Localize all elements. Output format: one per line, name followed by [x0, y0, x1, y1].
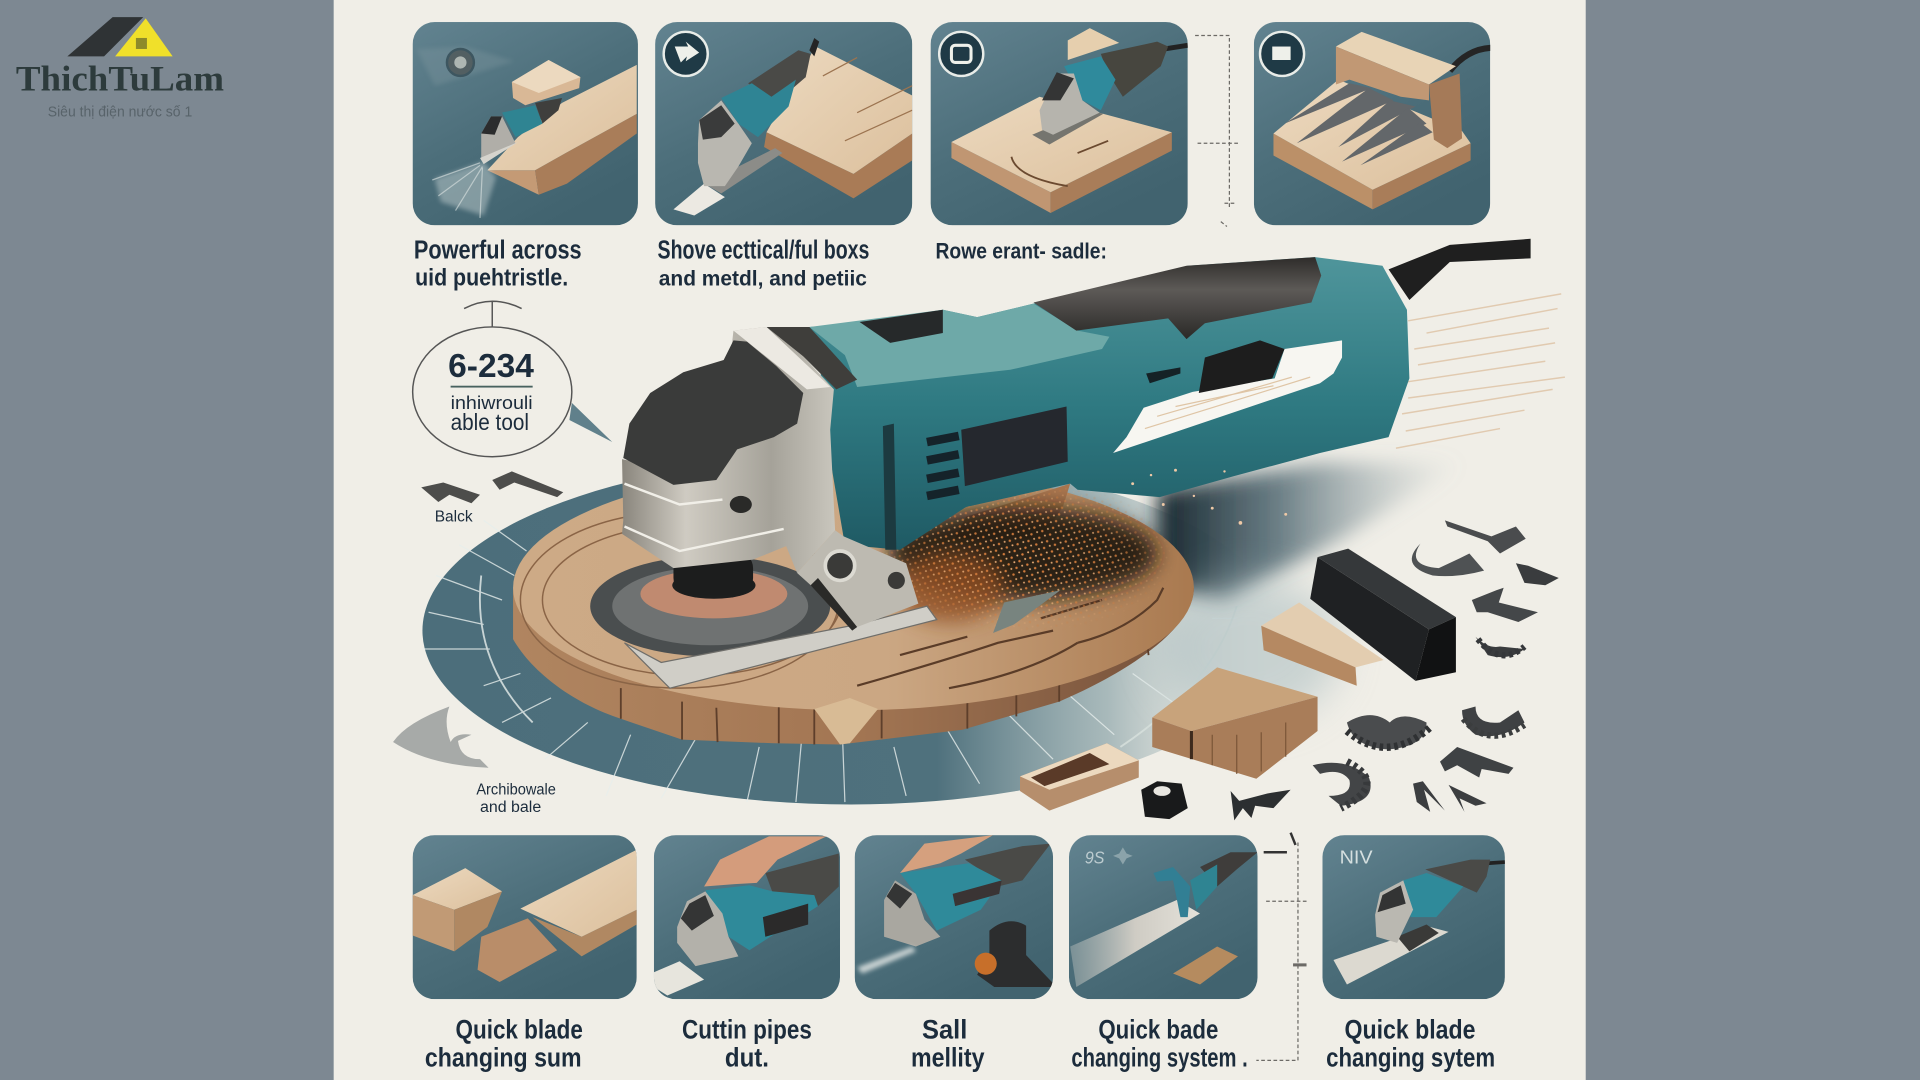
tool teal body — [1064, 56, 1116, 110]
bubble text: inhiwrouli — [451, 392, 533, 413]
card: top 3 tool on block — [931, 22, 1188, 225]
card background — [655, 22, 912, 225]
card background — [413, 835, 637, 999]
tick marks — [422, 520, 1255, 802]
bubble divider — [451, 386, 533, 388]
plate — [1397, 924, 1439, 951]
blade: round saw lower — [1313, 762, 1371, 808]
upright — [1336, 32, 1462, 148]
caption 2: Shove ecttical/ful boxs — [658, 236, 869, 264]
switch — [860, 310, 943, 343]
caption 2: and metdl, and petiic — [659, 267, 867, 290]
dark collar — [767, 327, 857, 389]
label — [476, 782, 556, 816]
white strip — [733, 327, 830, 389]
side panel — [961, 407, 1068, 486]
shadow and dust streak to right — [1157, 463, 1463, 600]
housing bands — [624, 484, 784, 551]
tool teal body — [1403, 873, 1463, 917]
tool silver head — [884, 880, 940, 947]
tool rear — [1101, 42, 1168, 97]
dark head cap — [623, 340, 803, 485]
card: top 4 blades in wood jig — [1254, 22, 1491, 225]
tool dark cap — [699, 105, 735, 140]
caption 1 — [425, 1014, 583, 1073]
wood disc — [513, 465, 1194, 744]
plank lines — [621, 624, 1149, 744]
tool dark cap — [1378, 885, 1406, 912]
tool rear — [765, 853, 839, 906]
blade: wrench — [1440, 747, 1513, 778]
spark burn — [888, 507, 1157, 600]
card background — [855, 835, 1053, 999]
cable — [1488, 862, 1505, 863]
logo wordmark: ThichTuLam — [16, 59, 224, 99]
white blade — [654, 961, 704, 996]
tool rear — [965, 844, 1051, 887]
tool teal body — [705, 885, 818, 950]
caption 3 — [911, 1014, 985, 1073]
card: bottom 4 saw — [1069, 835, 1258, 999]
captions: top row — [414, 236, 1107, 291]
tool rear — [748, 50, 811, 100]
bolts — [730, 496, 905, 589]
caption 3: Sall — [922, 1014, 967, 1044]
icon: arrow badge — [664, 32, 708, 76]
caption 1: Powerful across — [414, 236, 582, 264]
bubble text — [451, 392, 533, 435]
caption 4: Quick bade — [1098, 1014, 1218, 1044]
spray — [857, 947, 916, 973]
base plate — [624, 606, 937, 688]
upright block — [1068, 28, 1119, 60]
plank — [764, 47, 912, 198]
bubble tail — [569, 403, 612, 442]
wood chip — [1173, 947, 1238, 984]
blade: fork B — [1449, 785, 1487, 812]
white blade — [1333, 927, 1449, 984]
hand — [900, 835, 993, 873]
wood block A — [1261, 602, 1384, 686]
tool dark cap — [681, 895, 714, 931]
wood piece middle — [478, 918, 557, 982]
card background — [1069, 835, 1258, 999]
tool silver head — [1375, 880, 1413, 943]
main tool — [590, 239, 1531, 688]
teal body and handle — [809, 257, 1409, 550]
bubble text: able tool — [451, 409, 529, 435]
logo icon: worker on roof — [67, 17, 173, 56]
callout bubble: 6-234 — [413, 301, 612, 457]
sparks on body — [1131, 469, 1287, 525]
caption 2 — [682, 1014, 812, 1073]
light upper band — [809, 304, 1109, 387]
cable — [1450, 48, 1491, 71]
blade: feather — [1516, 563, 1559, 585]
sparkle — [1113, 847, 1133, 864]
card: bottom 1 wood pieces — [413, 835, 637, 999]
card: top 1 wood beam cut — [413, 22, 638, 225]
plate — [704, 148, 782, 193]
tool dark cap — [1042, 72, 1074, 100]
corner text: 9S — [1085, 847, 1105, 867]
tool panel — [953, 880, 1002, 906]
card: top 2 tool on plank — [655, 22, 912, 225]
trigger — [1199, 340, 1284, 393]
body teal — [1190, 864, 1217, 910]
caption 2 — [658, 236, 869, 290]
mini tool — [480, 98, 562, 164]
logo tagline: Siêu thị điện nước số 1 — [48, 104, 192, 120]
caption 3: Rowe erant- sadle: — [936, 238, 1107, 263]
connector: bottom dashed — [1256, 833, 1308, 1060]
spark glow — [894, 553, 1004, 622]
sanding pad — [590, 556, 830, 656]
power cord — [1389, 239, 1531, 300]
caption 3: mellity — [911, 1043, 985, 1073]
spark dots — [884, 488, 1167, 627]
pad post — [673, 551, 753, 595]
captions: bottom row — [425, 1014, 1495, 1073]
caption 1: changing sum — [425, 1043, 582, 1073]
wood tray — [1020, 743, 1139, 811]
blade: crescent — [1412, 544, 1484, 576]
label: Balck — [435, 509, 473, 526]
bubble stem — [464, 301, 522, 327]
wood wedge — [955, 484, 1070, 539]
icon: badge — [939, 32, 983, 76]
wedge shade — [811, 578, 857, 631]
arc disc — [422, 457, 1280, 804]
speed lines — [1396, 294, 1565, 448]
blade: hand saw — [1445, 520, 1526, 553]
black case — [1310, 549, 1456, 681]
blade: fork A — [1413, 781, 1445, 812]
work area: scale arc — [422, 457, 1280, 804]
card: bottom 2 hand with tool — [654, 835, 840, 999]
caption 5: Quick blade — [1344, 1014, 1476, 1044]
caption 1: Quick blade — [456, 1014, 583, 1044]
vents — [927, 436, 959, 496]
card background — [1254, 22, 1490, 225]
blade: round saw upper — [1347, 715, 1430, 749]
white blade — [673, 184, 725, 216]
small blades with label: Balck — [421, 471, 563, 526]
base — [1273, 80, 1471, 209]
cut mark — [1011, 141, 1108, 186]
knob — [975, 921, 1053, 987]
label: and bale — [480, 799, 541, 816]
card background — [654, 835, 840, 999]
tool cable — [1164, 45, 1188, 49]
bubble outline — [413, 327, 572, 457]
base block — [951, 97, 1172, 213]
handle — [1153, 867, 1190, 917]
handle opening — [1113, 340, 1342, 453]
silver housing — [622, 327, 835, 573]
cracks — [857, 588, 1163, 688]
card background — [413, 22, 638, 225]
card: bottom 5 tool on blade — [1322, 835, 1505, 999]
blades — [1284, 83, 1433, 165]
corner text: NIV — [1340, 846, 1373, 867]
tool teal body — [900, 863, 1002, 931]
lower foot — [797, 530, 918, 627]
wood block B — [1152, 667, 1318, 779]
cut spray — [432, 162, 496, 218]
caption 1: uid puehtristle. — [415, 264, 568, 291]
wood beam — [487, 65, 637, 195]
tool tip — [809, 38, 819, 56]
plate — [1032, 110, 1103, 144]
blade: lash — [1231, 790, 1291, 820]
crescent blade — [393, 707, 489, 768]
broken chunk — [814, 698, 878, 744]
sparks — [874, 488, 1170, 634]
blade: claw — [1472, 588, 1538, 622]
tool silver head — [698, 100, 752, 186]
loose blade on disc — [993, 590, 1060, 633]
caption 4 — [1071, 1014, 1248, 1073]
pale shade under parts — [1157, 576, 1341, 722]
loose parts group — [1020, 520, 1559, 820]
caption 1 — [414, 236, 582, 291]
card background — [1322, 835, 1505, 999]
caption 2: Cuttin pipes — [682, 1014, 812, 1044]
left crescent blade with label — [393, 707, 556, 816]
gear emblem — [420, 48, 508, 84]
wood piece right — [520, 850, 637, 956]
small blade right — [492, 471, 563, 497]
tool teal body — [721, 80, 796, 137]
growth rings — [520, 512, 841, 688]
disc side — [513, 588, 1194, 744]
tool panel — [763, 904, 808, 937]
blade: arc saw — [1462, 707, 1524, 736]
caption 5 — [1326, 1014, 1495, 1073]
saw blade — [1070, 900, 1200, 987]
tool dark cap — [887, 883, 912, 909]
caption 4: changing system . — [1071, 1043, 1248, 1073]
connector: top dashed — [1195, 36, 1238, 227]
disc top — [513, 465, 1194, 710]
knob — [1141, 781, 1188, 819]
small blade left — [421, 482, 480, 503]
side slit — [883, 424, 896, 550]
bubble number: 6-234 — [448, 348, 534, 385]
label: Archibowale — [476, 782, 556, 799]
caption 5: changing sytem — [1326, 1043, 1495, 1073]
blade: toothed — [1476, 637, 1524, 657]
card background — [931, 22, 1188, 225]
rear grip — [1033, 257, 1321, 339]
card: bottom 3 hand with tool and knob — [855, 835, 1053, 999]
wood piece left — [413, 868, 502, 951]
rear — [1200, 852, 1258, 887]
tool silver head — [677, 891, 738, 966]
logo: ThichTuLam — [16, 17, 224, 120]
caption 2: dut. — [725, 1043, 769, 1073]
tool rear — [1425, 860, 1490, 893]
lines in opening — [1145, 377, 1310, 429]
hand — [704, 836, 827, 887]
centre panel — [334, 0, 1586, 1080]
tool silver head — [1040, 73, 1100, 135]
icon: badge — [1260, 32, 1304, 76]
slot — [1146, 367, 1180, 383]
wood block — [512, 60, 580, 105]
